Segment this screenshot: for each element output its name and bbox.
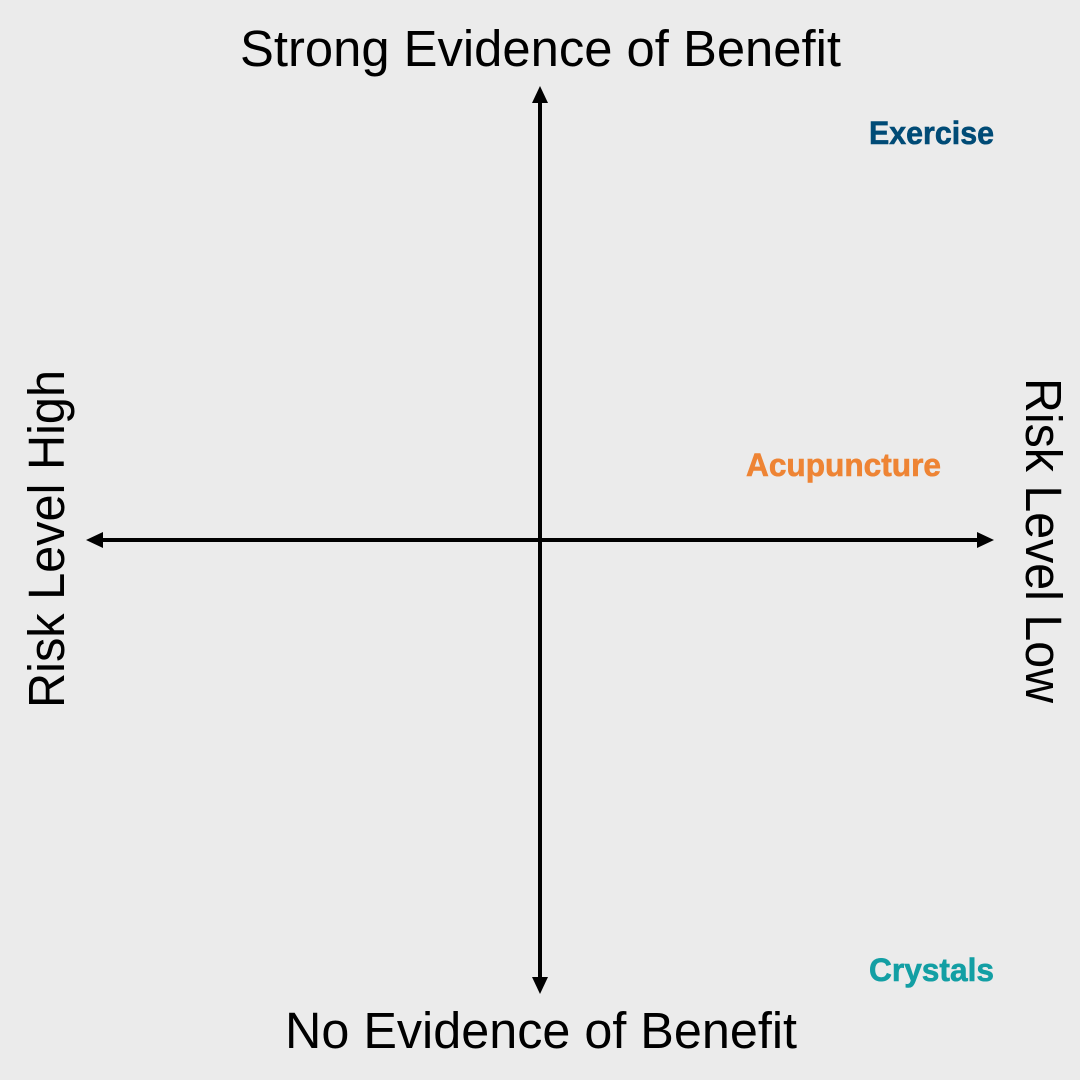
data label: Acupuncture: Acupuncture [746,447,941,483]
data label: Crystals: Crystals [869,952,994,988]
heading: right axis label: Risk Level Low [1015,378,1072,703]
data label: Exercise: Exercise [869,115,994,151]
heading: bottom axis label: No Evidence of Benefit [285,1002,797,1059]
heading: left axis label: Risk Level High [18,370,75,708]
vertical axis arrow [532,86,548,994]
heading: top axis label: Strong Evidence of Benefit [240,20,841,77]
horizontal axis arrow [86,532,994,548]
